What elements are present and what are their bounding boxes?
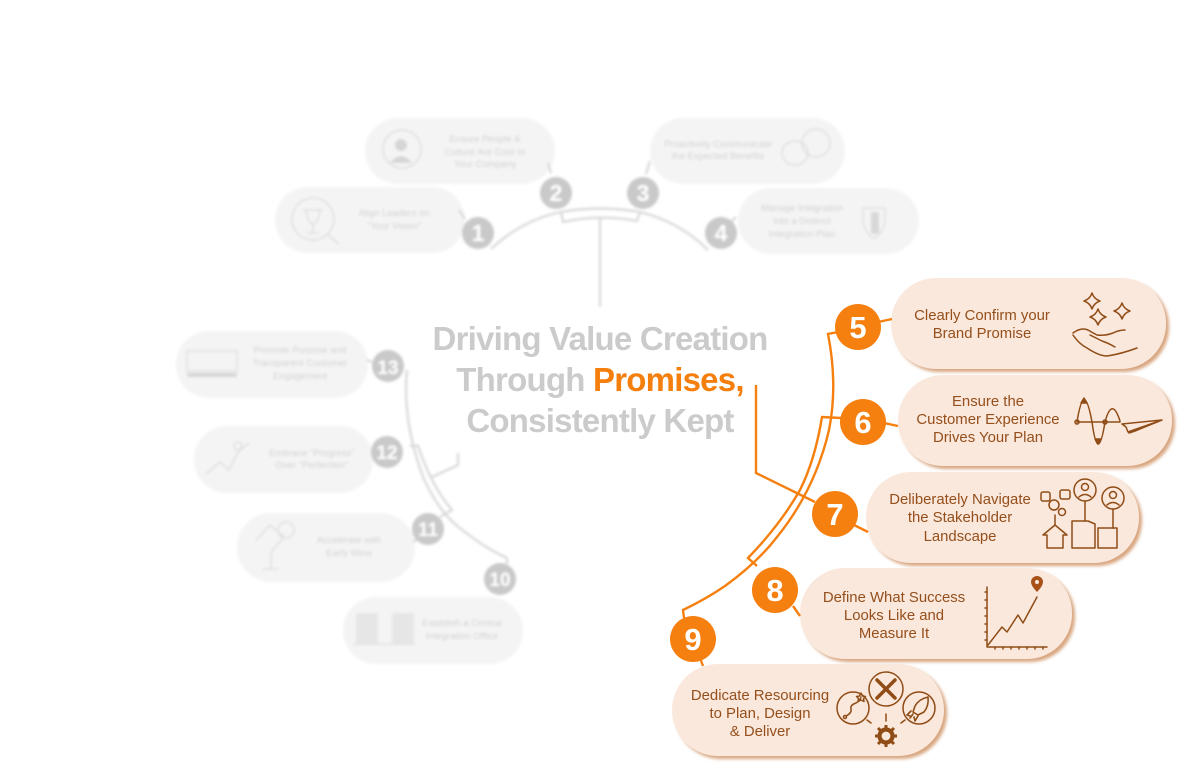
pill: step 9 (672, 664, 944, 756)
text: step 6: Ensure the (952, 394, 1024, 410)
step 10 pill: 10 (489, 570, 511, 591)
text: step 9: to Plan, Design (710, 706, 810, 722)
connector: step 7 (854, 525, 868, 532)
icon: rising line chart with pin (985, 576, 1047, 649)
step 4 pill: into a Distinct (773, 216, 831, 227)
top connector arcs (491, 208, 708, 307)
step 13 pill: Engagement (273, 371, 327, 382)
step 11 pill (237, 513, 444, 582)
step 12 pill: 12 (376, 443, 398, 464)
step 5 (835, 278, 1166, 369)
pill: step 5 (891, 278, 1166, 369)
step 10 pill: Integration Office (426, 631, 498, 642)
step 13 pill (176, 331, 404, 398)
connector: step 9 (700, 658, 703, 666)
title: Through Promises, (456, 361, 744, 398)
step 10 pill: Establish a Central (422, 618, 502, 629)
connector: step 8 (793, 606, 800, 616)
step 1 pill: 1 (472, 220, 485, 246)
pill: step 6 (898, 375, 1172, 466)
step 12 pill: Embrace "Progress" (269, 448, 355, 459)
text: step 8: Define What Success (823, 590, 965, 606)
step 1 pill: Align Leaders on (358, 208, 430, 219)
step 13 pill: Promote Purpose and (254, 345, 346, 356)
badge: step 9: 9 (684, 622, 702, 657)
badge: step 8 (752, 567, 798, 613)
text: step 8: Measure It (859, 626, 930, 642)
step 12 pill: Over "Perfection" (276, 460, 348, 471)
step 7 (812, 472, 1139, 563)
badge: step 5: 5 (849, 310, 867, 345)
orange connector arcs (683, 332, 841, 618)
step 4 pill (705, 188, 919, 254)
icon: stakeholders (1041, 479, 1124, 548)
title (433, 320, 767, 439)
step 2 pill: Your Company (454, 159, 516, 170)
text: step 6: Drives Your Plan (933, 430, 1043, 446)
step 12 pill (194, 426, 403, 493)
title: Driving Value Creation (433, 320, 767, 357)
step 11 pill: 11 (418, 520, 438, 541)
step 3 pill: 3 (637, 180, 649, 206)
text: step 7: Landscape (924, 529, 996, 545)
badge: step 8: 8 (766, 573, 784, 608)
title: Consistently Kept (466, 402, 734, 439)
left connector arcs (406, 370, 507, 558)
connector: step 6 (884, 423, 898, 426)
step 13 pill: Transparent Customer (253, 358, 347, 369)
text: step 8: Looks Like and (844, 608, 944, 624)
step 2 pill: Ensure People & (449, 134, 521, 145)
badge: step 9 (670, 616, 716, 662)
step 10 pill (343, 558, 523, 664)
step 9 (670, 616, 944, 756)
step 13 pill: 13 (377, 358, 399, 379)
text: step 7: the Stakeholder (908, 510, 1012, 526)
step 2 pill (365, 118, 572, 209)
step 11 pill: Early Wins (326, 548, 372, 559)
badge: step 6: 6 (854, 405, 872, 440)
text: step 6: Customer Experience (916, 412, 1060, 428)
text: step 5: Clearly Confirm your (914, 308, 1050, 324)
step 4 pill: Integration Plan (769, 229, 835, 240)
badge: step 6 (840, 399, 886, 445)
text: step 9: & Deliver (730, 724, 790, 740)
step 1 pill (275, 187, 494, 253)
faded steps 10 to 13 (176, 331, 523, 664)
badge: step 5 (835, 304, 881, 350)
step 3 pill (627, 118, 845, 209)
step 1 pill: "Your Vision" (367, 221, 421, 232)
text: step 7: Deliberately Navigate (889, 492, 1031, 508)
faded steps 1 to 4 (275, 118, 919, 307)
pill: step 8 (800, 568, 1072, 659)
text: step 9: Dedicate Resourcing (691, 688, 829, 704)
step 4 pill: Manage Integration (761, 203, 843, 214)
badge: step 7: 7 (826, 497, 844, 532)
step 11 pill: Accelerate with (317, 535, 381, 546)
step 6 (840, 375, 1172, 466)
icon: wave and paper plane (1075, 398, 1162, 444)
step 2 pill: 2 (550, 180, 562, 206)
text: step 5: Brand Promise (933, 326, 1031, 342)
step 3 pill: Proactively Communicate (664, 139, 772, 150)
connector: step 5 (878, 319, 892, 322)
icon: plan, design, deliver (837, 672, 935, 747)
pill: step 7 (866, 472, 1139, 563)
step 4 pill: 4 (715, 220, 728, 246)
icon: hand with sparkles (1073, 293, 1137, 356)
step 8 (752, 567, 1072, 659)
step 3 pill: the Expected Benefits (672, 151, 764, 162)
badge: step 7 (812, 491, 858, 537)
step 2 pill: Culture Are Core to (444, 147, 526, 158)
